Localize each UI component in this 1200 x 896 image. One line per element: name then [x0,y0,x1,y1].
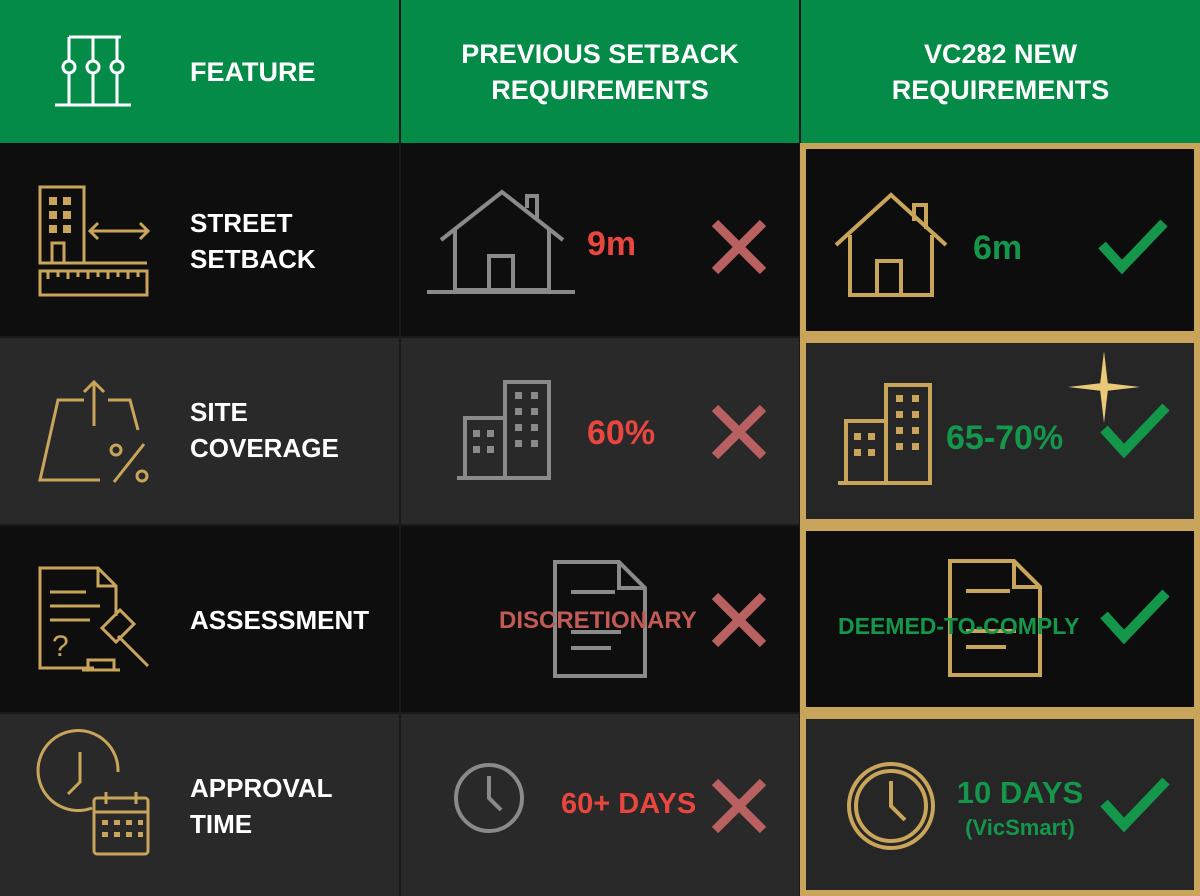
text: DISCRETIONARY [499,607,697,634]
row 3: assessment [0,526,399,712]
row 3: assessment: ASSESSMENT [190,605,369,635]
row 1: street setback [0,143,399,336]
header: previous: REQUIREMENTS [491,74,709,104]
row 1: street setback: STREET [190,208,293,238]
header: new: VC282 NEW [924,38,1077,68]
header: new: REQUIREMENTS [892,74,1109,104]
text: 9m [587,225,636,263]
text: 10 DAYS [957,775,1083,810]
icon: sparkle [1068,351,1140,423]
text: 60% [587,414,655,452]
row 4: approval time [0,714,399,896]
row 2: site coverage: SITE [190,397,248,427]
header: feature [0,0,399,143]
header: previous: PREVIOUS SETBACK [461,38,739,68]
text: 6m [973,229,1022,267]
text: DEEMED-TO-COMPLY [838,613,1080,639]
row 3: assessment: ? [52,630,69,663]
text: 65-70% [946,419,1063,457]
row 4: approval time: TIME [190,809,252,839]
row 2: site coverage: COVERAGE [190,433,339,463]
header: new [801,0,1200,143]
row 1: street setback: SETBACK [190,244,316,274]
text: (VicSmart) [965,815,1075,840]
row 2: site coverage [0,338,399,524]
text: 60+ DAYS [561,788,696,820]
header: previous [401,0,799,143]
header: feature: FEATURE [190,57,316,87]
row 4: approval time: APPROVAL [190,773,333,803]
